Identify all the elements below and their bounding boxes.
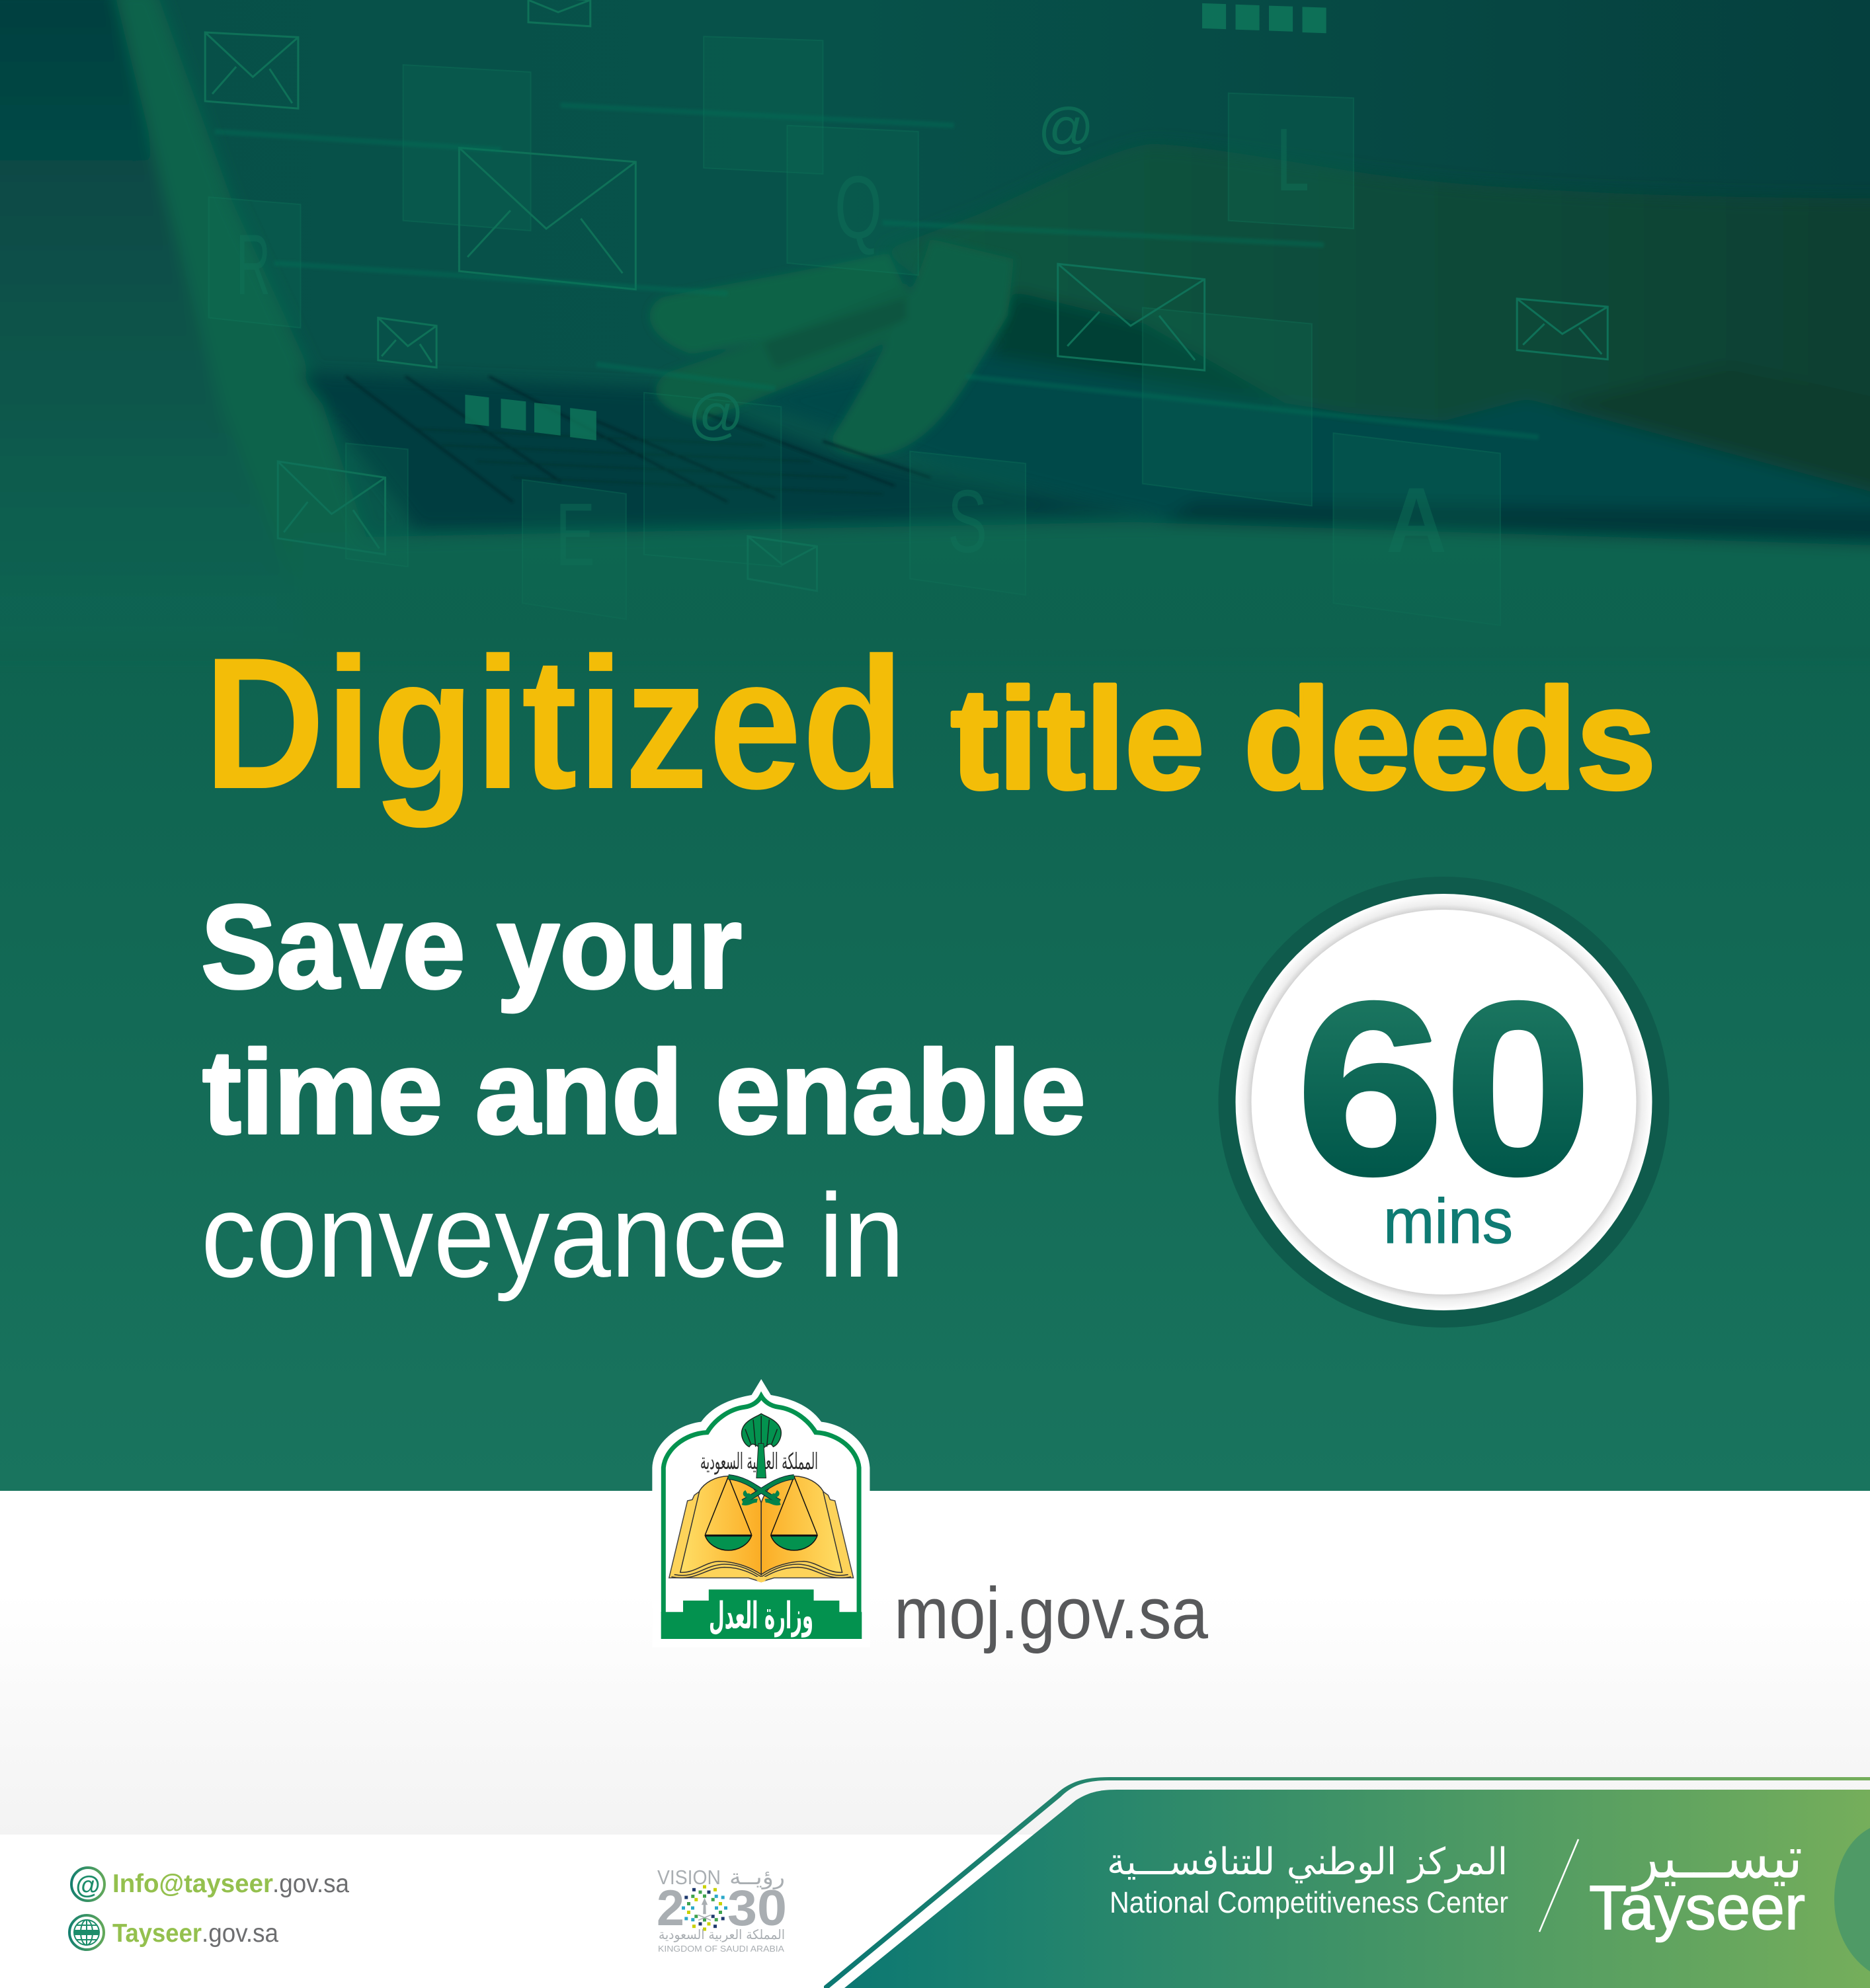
digits 30: 30 xyxy=(727,1880,787,1936)
right scale xyxy=(771,1476,817,1550)
vision arabic: رؤيــة xyxy=(729,1864,785,1889)
icon: globe xyxy=(69,1915,104,1950)
badge white disc xyxy=(1235,894,1652,1310)
letters on cards xyxy=(236,110,1447,584)
at-signs: @ xyxy=(688,383,745,445)
letters on cards: L xyxy=(1276,110,1309,210)
translucent light bands xyxy=(215,105,1539,437)
at-signs: @ xyxy=(1037,97,1094,159)
divider slash xyxy=(1539,1839,1578,1932)
sub-heading text block: Save your xyxy=(201,881,742,1014)
left scale xyxy=(705,1476,752,1550)
keyboard bars xyxy=(465,3,1326,440)
sub-heading text block: conveyance in xyxy=(201,1170,905,1302)
book page waves xyxy=(671,1564,851,1579)
number 60: 60 xyxy=(1296,951,1592,1226)
headline: Digitized title deeds: title deeds xyxy=(951,658,1656,818)
Ministry of Justice logo xyxy=(652,1379,870,1648)
logo bottom plinth xyxy=(661,1589,862,1639)
letters on cards: E xyxy=(555,485,595,584)
letters on cards: Q xyxy=(834,157,882,257)
green background xyxy=(0,0,1870,1491)
kingdom arabic: المملكة العربية السعودية xyxy=(659,1927,785,1942)
palm tree xyxy=(742,1413,781,1478)
letters on cards: R xyxy=(236,216,270,313)
crossed swords xyxy=(729,1477,794,1503)
kingdom english: KINGDOM OF SAUDI ARABIA xyxy=(658,1944,784,1954)
headline: Digitized title deeds: Digitized xyxy=(204,619,905,829)
icon: at sign: @ xyxy=(75,1872,101,1899)
logo white shield xyxy=(652,1379,870,1648)
photo base tone xyxy=(0,0,1870,661)
book spine xyxy=(760,1503,762,1575)
open book right page xyxy=(761,1476,842,1575)
open book left page xyxy=(680,1476,761,1575)
background photo: hand typing on laptop xyxy=(0,0,1870,661)
banner right ellipse xyxy=(1834,1828,1870,1971)
center name english: National Competitiveness Center xyxy=(1110,1886,1508,1919)
banner outline stroke xyxy=(824,1777,1870,1988)
mins label: mins xyxy=(1383,1186,1513,1257)
tayseer english: Tayseer xyxy=(1589,1873,1805,1943)
badge outer ring xyxy=(1218,877,1669,1328)
vision emblem xyxy=(682,1886,727,1930)
letters on cards: S xyxy=(948,471,987,571)
tayseer arabic: تيســـير xyxy=(1631,1823,1803,1892)
logo green outline xyxy=(663,1396,859,1613)
website address xyxy=(112,1919,278,1948)
hand fingers xyxy=(650,239,1014,456)
website address: Tayseer xyxy=(112,1919,202,1948)
website: moj.gov.sa: moj.gov.sa xyxy=(894,1573,1209,1654)
sub-heading text block xyxy=(201,881,1086,1302)
keyboard keys xyxy=(346,376,930,502)
banner panel xyxy=(844,1790,1870,1988)
white lower section xyxy=(0,1491,1870,1835)
digit 2: 2 xyxy=(657,1880,684,1936)
photo fade into background xyxy=(0,529,1870,661)
center name arabic: المركز الوطني للتنافســـية xyxy=(1107,1841,1508,1884)
badge inner disc xyxy=(1251,910,1636,1294)
at-signs xyxy=(688,97,1094,445)
logo kingdom calligraphy: المملكة العربية السعودية xyxy=(700,1449,818,1475)
envelope outlines xyxy=(205,0,1607,591)
Vision 2030 logo xyxy=(657,1864,787,1954)
letters on cards: A xyxy=(1386,468,1447,572)
Tayseer footer banner xyxy=(824,1777,1870,1988)
website address: .gov.sa xyxy=(202,1919,278,1948)
icon: at sign xyxy=(71,1868,104,1901)
logo artwork xyxy=(652,1379,870,1648)
white footer strip xyxy=(0,1835,1870,1988)
open book outer pages xyxy=(669,1491,854,1582)
Ministry of Justice logo: وزارة العدل xyxy=(709,1595,813,1638)
email address xyxy=(112,1870,349,1898)
email address: Info@tayseer xyxy=(112,1870,273,1898)
vision word: VISION xyxy=(657,1866,721,1889)
blurred laptop and hand xyxy=(0,0,1870,656)
footer contact: website xyxy=(69,1915,278,1950)
footer contact: email xyxy=(71,1868,349,1901)
book bottom tab xyxy=(756,1577,767,1582)
translucent letter cards xyxy=(209,36,1500,625)
email address: .gov.sa xyxy=(272,1870,349,1898)
60 mins badge xyxy=(1218,877,1669,1328)
headline: Digitized title deeds xyxy=(204,619,1656,829)
sub-heading text block: time and enable xyxy=(202,1026,1086,1159)
